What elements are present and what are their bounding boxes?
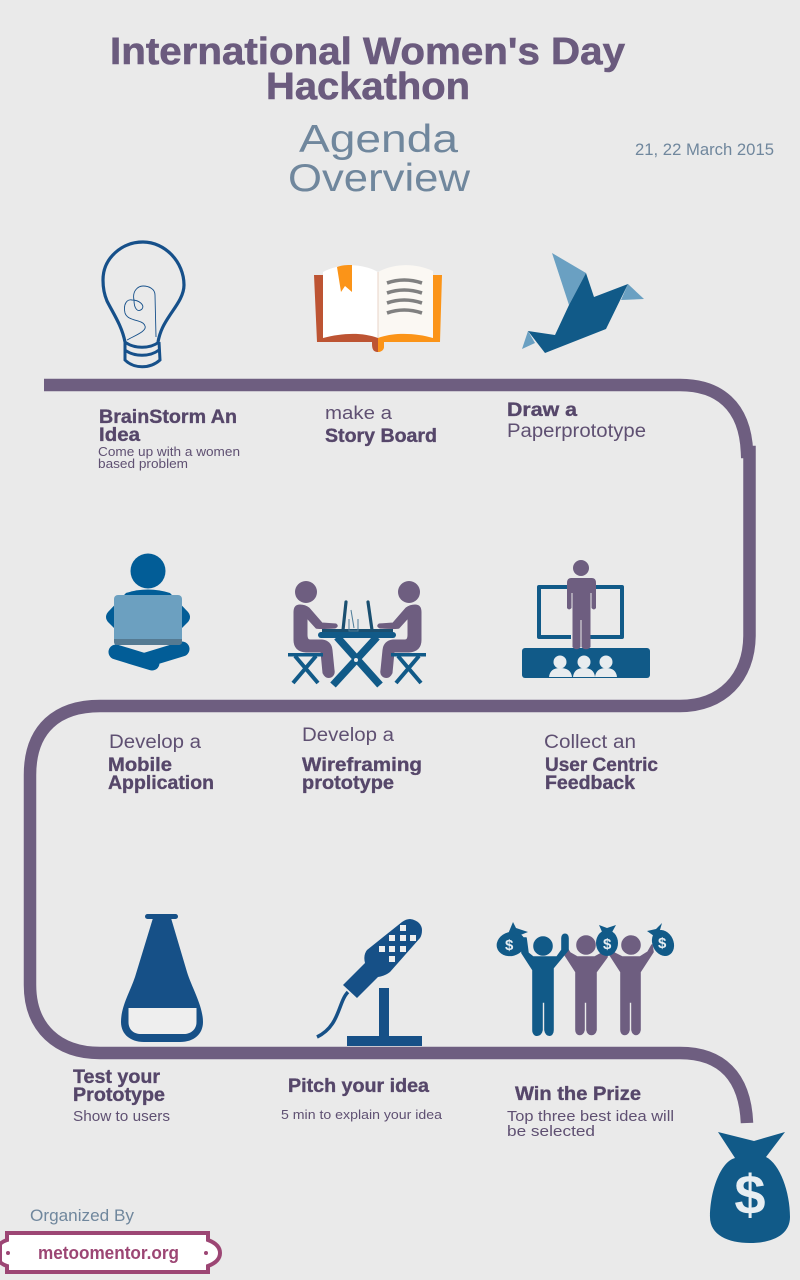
step text: mobile application: Application [108,773,214,794]
organized by label: Organized By [30,1206,135,1225]
step text: test your prototype: Test your [73,1067,161,1088]
step text: paper prototype: Draw a [507,400,577,421]
icon: three winners holding money bags: $ [658,935,667,952]
step text: test your prototype [73,1067,170,1125]
step text: brainstorm: Idea [99,425,140,446]
step text: mobile application [108,732,214,794]
logo: metoomentor.org: metoomentor.org [38,1243,179,1263]
step text: win the prize: be selected [507,1123,595,1140]
subtitle: agenda overview [288,118,471,200]
step text: pitch your idea: Pitch your idea [288,1076,429,1097]
step text: wireframing prototype: Wireframing [302,755,422,776]
icon: two people at table [288,581,426,685]
date: 21, 22 March 2015 [635,140,774,159]
icon: three winners holding money bags: $ [505,937,514,954]
icon: three winners holding money bags: $ [603,936,612,953]
icon: flask [121,914,203,1042]
step text: user feedback: User Centric [545,755,658,776]
step text: mobile application: Mobile [108,755,172,776]
step text: brainstorm: BrainStorm An [99,407,237,428]
title [110,31,625,108]
icon: open book [314,265,442,352]
step text: brainstorm: Come up with a women [98,444,240,459]
title: Hackathon [266,66,470,108]
step text: pitch your idea [281,1076,443,1122]
step text: win the prize: Top three best idea will [507,1108,674,1125]
step text: brainstorm [98,407,240,471]
icon: microphone [317,919,422,1046]
step text: paper prototype [507,400,646,442]
step text: test your prototype: Show to users [73,1108,170,1125]
icon: three winners holding money bags [494,922,678,1035]
icon: light bulb [103,242,184,367]
step text: wireframing prototype [302,725,422,794]
icon: money bag: $ [734,1163,766,1226]
icon: origami bird [522,253,644,353]
step text: win the prize [507,1084,674,1140]
step text: win the prize: Win the Prize [515,1084,641,1105]
step text: user feedback: Collect an [544,732,636,753]
step text: story board: Story Board [325,426,437,447]
step text: test your prototype: Prototype [73,1085,165,1106]
step text: user feedback [544,732,658,794]
step text: wireframing prototype: prototype [302,773,394,794]
subtitle: agenda overview: Agenda [299,118,458,161]
step text: story board [325,403,437,447]
logo: metoomentor.org [0,1233,220,1272]
icon: money bag [710,1132,790,1243]
title: International Women's Day [110,31,625,73]
step text: wireframing prototype: Develop a [302,725,394,746]
subtitle: agenda overview: Overview [288,157,471,200]
winding path [30,385,750,1123]
step text: mobile application: Develop a [109,732,201,753]
icon: presenter and audience [522,560,650,678]
step text: paper prototype: Paperprototype [507,421,646,442]
step text: pitch your idea: 5 min to explain your idea [281,1107,443,1122]
step text: story board: make a [325,403,393,423]
icon: person with laptop [106,554,190,663]
step text: user feedback: Feedback [545,773,635,794]
step text: brainstorm: based problem [98,456,188,471]
